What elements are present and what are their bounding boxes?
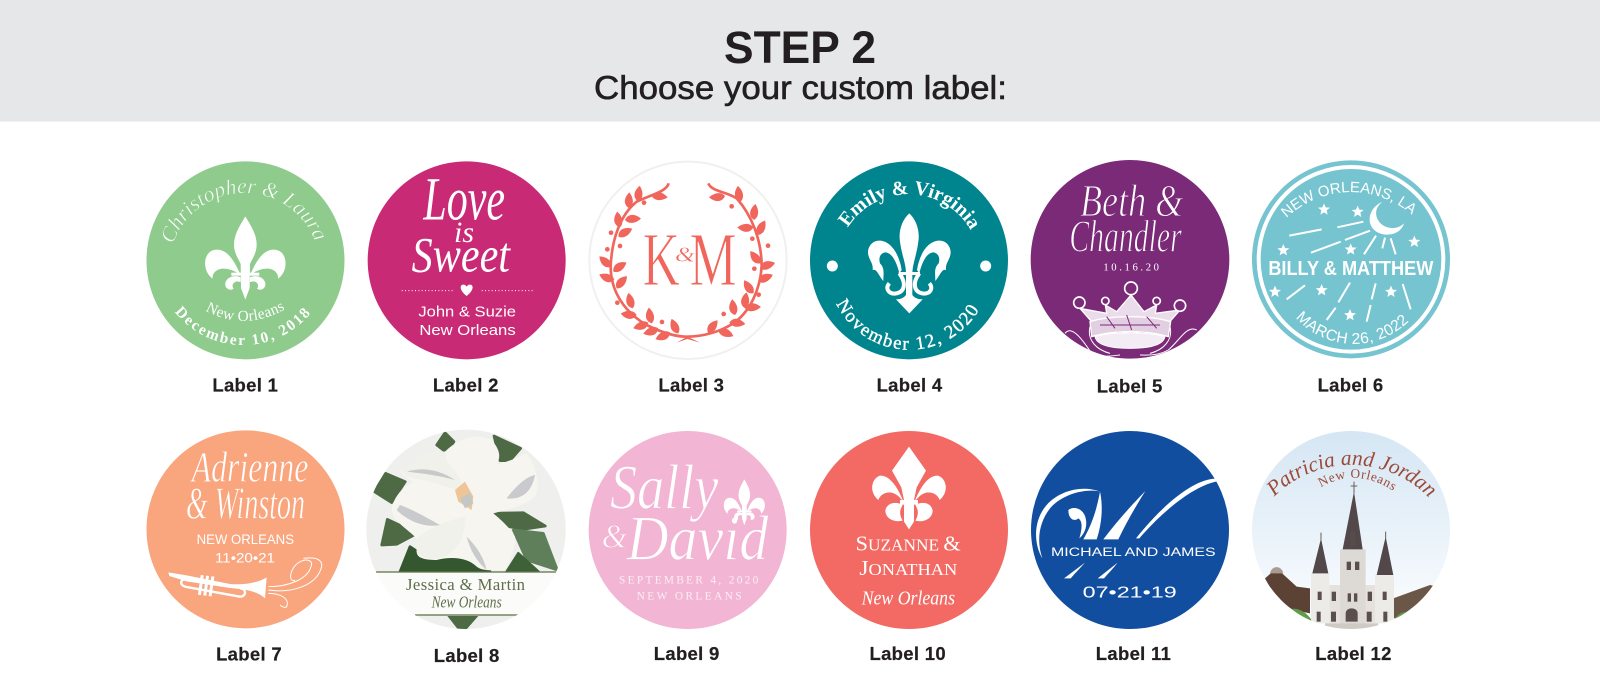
city arc: New Orleans [1317,469,1396,490]
names script [602,452,769,573]
date: 07•21•19 [1083,585,1177,602]
trumpet icon [168,572,267,598]
date: 10.16.20 [1103,263,1159,274]
names script [1069,176,1183,262]
date: 11•20•21 [215,550,275,566]
names small caps: SUZANNE & [856,532,961,556]
label 11: blue monogram [1031,431,1229,629]
names small caps [856,532,961,580]
date arc: December 10, 2018 [174,305,310,345]
love is sweet script: Sweet [412,227,511,283]
date arc: November 12, 2020 [836,298,978,350]
caption: label 12: Label 12 [1315,643,1392,664]
city script: New Orleans [431,592,502,611]
names: BILLY & MATTHEW [1268,258,1433,280]
white ring [1259,167,1443,352]
city: NEW ORLEANS [197,531,294,547]
city script: New Orleans [861,587,955,609]
names and city: New Orleans [419,323,516,339]
names: MICHAEL AND JAMES [1051,545,1216,559]
date and city: NEW ORLEANS [637,590,742,602]
caption: label 4: Label 4 [877,374,943,396]
love is sweet script: is [454,216,474,249]
side dots [827,260,991,271]
label 3: white wreath monogram [589,162,787,359]
label 9: pink sally and david [589,431,787,629]
label 12: cathedral [1252,431,1450,629]
names arc: Christopher & Laura [163,180,324,242]
label 1: green fleur-de-lis [146,161,344,360]
names script: & [602,518,628,555]
fleur-de-lis icon [868,213,951,313]
K and M monogram: K [643,217,680,302]
caption: label 10: Label 10 [869,643,946,664]
caption: label 1: Label 1 [212,374,278,396]
names script: Beth & [1080,176,1183,226]
names small caps: JONATHAN [859,556,957,580]
fleur-de-lis icon [724,479,765,525]
fleur-de-lis icon [205,216,286,300]
label 6: aqua stamp with moon [1252,160,1450,358]
wreath [597,183,776,343]
caption: label 9: Label 9 [654,643,720,664]
names and city: John & Suzie [418,305,516,321]
label 8: magnolia [363,430,570,630]
names script: Chandler [1069,212,1182,262]
fleur-de-lis icon [872,447,946,529]
love is sweet script [412,165,511,283]
city arc: New Orleans [206,302,284,321]
label 7: peach trumpet [146,430,344,628]
heart divider [402,285,535,296]
magnolia illustration [374,432,558,629]
caption: label 3: Label 3 [658,374,724,396]
K and M monogram: & [675,245,695,267]
names and city [418,305,516,339]
title: step 2: STEP 2 [724,22,876,73]
caption: label 8: Label 8 [434,645,500,666]
date and city [619,574,759,602]
names script: Adrienne [189,444,308,492]
moon icon [1370,202,1404,235]
label 4: teal fleur-de-lis [810,161,1008,360]
names script: David [626,503,769,573]
crown illustration [1065,282,1197,356]
love is sweet script: Love [423,165,505,233]
names script [186,444,308,528]
K and M monogram [643,217,737,302]
header band [0,0,1600,122]
date and city: SEPTEMBER 4, 2020 [619,574,759,586]
W monogram [1036,479,1217,578]
label 2: magenta love is sweet [368,161,566,359]
names arc: Patricia and Jordan [1266,452,1435,498]
names script: Sally [610,452,719,522]
caption: label 11: Label 11 [1096,643,1171,664]
musical swirl [268,558,322,607]
stars [1269,203,1420,320]
caption: label 5: Label 5 [1097,376,1163,396]
top arc text: NEW ORLEANS, LA [1280,182,1415,218]
names script: & Winston [186,478,305,528]
names: Jessica & Martin [406,575,526,594]
K and M monogram: M [689,217,737,302]
names arc: Emily & Virginia [837,181,978,230]
caption: label 6: Label 6 [1318,374,1383,396]
bottom arc text: MARCH 26, 2022 [1296,310,1408,344]
label 5: purple crown [1031,160,1229,359]
cathedral illustration [1265,482,1450,630]
label 10: coral suzanne and jonathan [810,431,1008,629]
caption: label 2: Label 2 [433,374,499,396]
caption: label 7: Label 7 [216,644,282,664]
subtitle: Choose your custom label: [594,69,1007,106]
rays [1287,222,1411,322]
